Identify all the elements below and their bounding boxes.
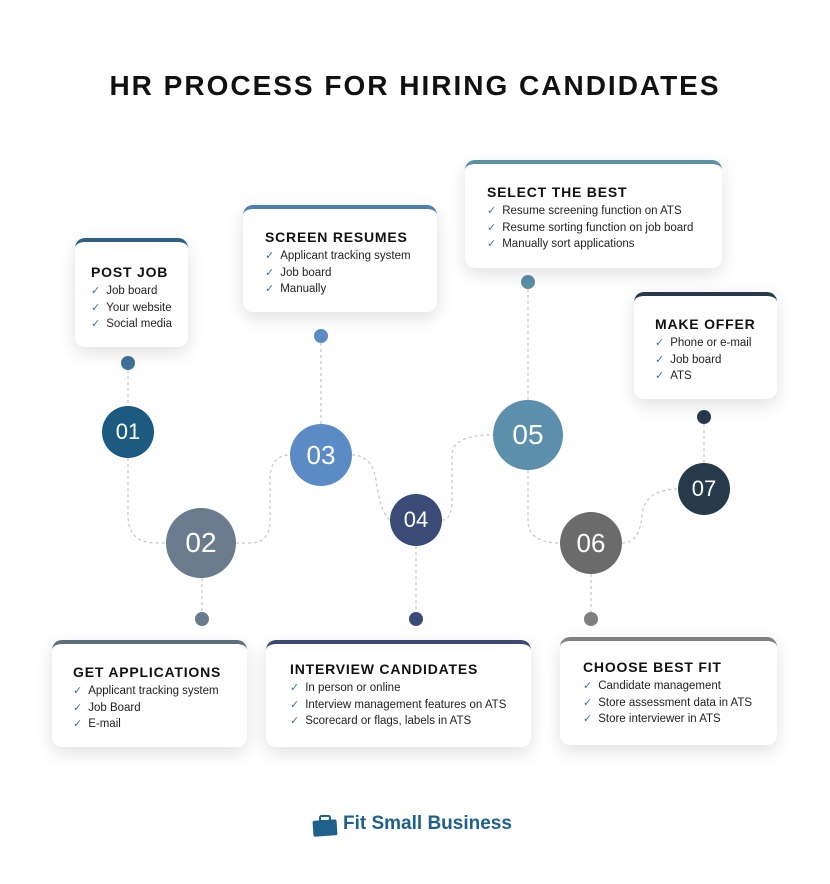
card: interview candidates: Scorecard or flags, labels in ATS [305,715,471,727]
dots [121,275,711,626]
card: screen resumes: Applicant tracking system [280,250,411,262]
card: make offer: Job board [670,354,721,366]
card: get applications: Applicant tracking system [88,685,219,697]
circle 03: 03 [307,440,335,470]
card: choose best fit: Candidate management [598,680,721,692]
circle 03 [290,424,352,486]
circle 01 [102,406,154,458]
circle 07: 07 [692,476,716,501]
card: make offer [634,292,777,399]
card: get applications [52,640,247,747]
card: screen resumes: Manually [280,283,326,295]
card: select the best [465,160,722,268]
card: choose best fit: Store interviewer in ATS [598,713,721,725]
circle 06: 06 [577,528,605,558]
card: select the best: Resume sorting function on job board [502,222,693,234]
card: select the best: Resume screening function on ATS [502,205,682,217]
card: get applications: GET APPLICATIONS [73,664,221,680]
card: make offer: Phone or e-mail [670,337,751,349]
circle 02: 02 [185,527,217,558]
circle 05: 05 [512,419,544,450]
card: choose best fit [560,637,777,745]
card: post job: Social media [106,318,172,330]
logo: Fit Small Business [343,813,512,834]
circle 07 [678,463,730,515]
circle 01: 01 [116,419,140,444]
card: screen resumes: SCREEN RESUMES [265,229,408,245]
title: HR PROCESS FOR HIRING CANDIDATES [109,70,721,101]
card: screen resumes: Job board [280,266,331,278]
card: interview candidates [266,640,531,747]
card: post job: POST JOB [91,264,168,280]
card: post job: Your website [106,302,172,314]
card: screen resumes [243,205,437,312]
circle 05 [493,400,563,470]
card: post job: Job board [106,285,157,297]
circle 06 [560,512,622,574]
card: choose best fit: Store assessment data in ATS [598,696,752,708]
circle 02 [166,508,236,578]
icon: briefcase [312,815,338,837]
circle 04 [390,494,442,546]
card: get applications: Job Board [88,702,141,714]
circle 04: 04 [404,507,428,532]
card: post job [75,238,188,347]
card: interview candidates: INTERVIEW CANDIDATES [290,661,478,677]
card: select the best: Manually sort applications [502,238,635,250]
card: make offer: MAKE OFFER [655,316,756,332]
card: select the best: SELECT THE BEST [487,184,627,200]
card: make offer: ATS [670,370,692,382]
card: get applications: E-mail [88,718,121,730]
card: choose best fit: CHOOSE BEST FIT [583,659,722,675]
card: interview candidates: Interview management features on ATS [305,698,506,710]
card: interview candidates: In person or online [305,682,400,694]
